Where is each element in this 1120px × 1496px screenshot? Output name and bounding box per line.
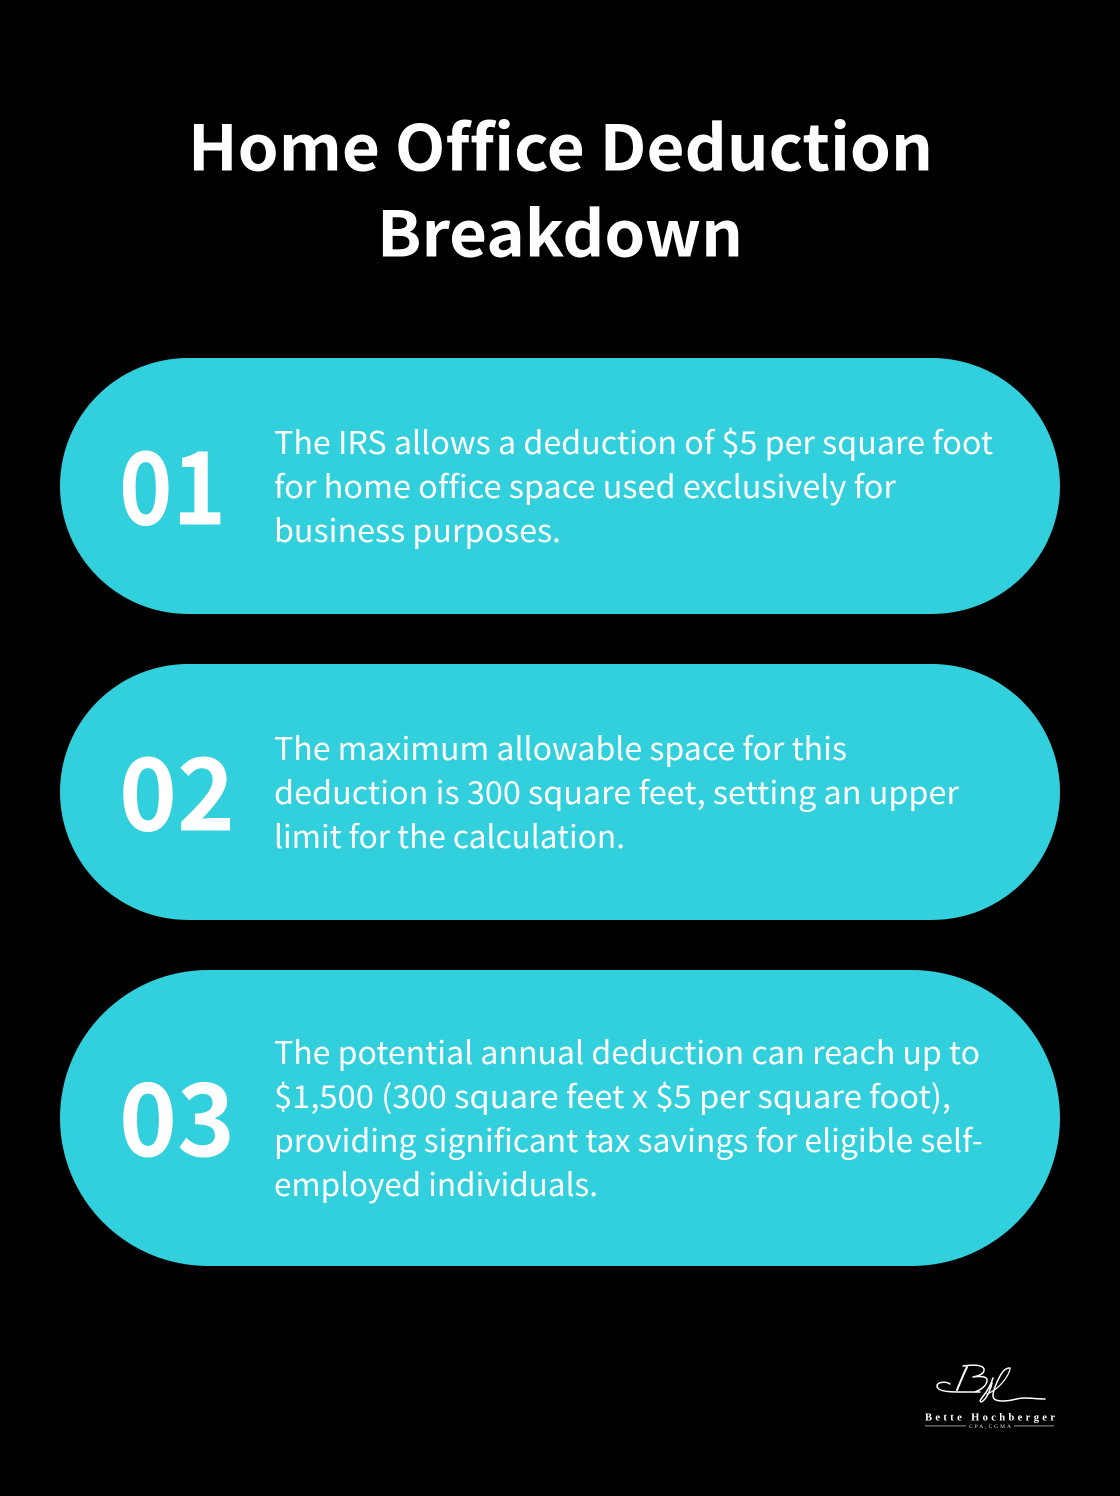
text block: step 01: The IRS allows a deduction of $5 per square foot [274,418,993,464]
title: Home Office Deduction [188,98,933,190]
logo name: Bette Hochberger [925,1412,1055,1424]
text block: step 02 [274,724,960,858]
text block: step 03 [274,1028,983,1206]
text block: step 01 [274,418,993,552]
title [188,98,933,276]
step number 02: 02 [119,714,235,860]
panel: step 03 [60,970,1060,1266]
panel: step 02 [60,664,1060,920]
text block: step 02: limit for the calculation. [274,812,625,858]
text block: step 02: The maximum allowable space for this [274,724,847,770]
text block: step 03: providing significant tax savings for eligible self- [274,1116,983,1162]
text block: step 03: employed individuals. [274,1160,598,1206]
icon: signature monogram [937,1365,1045,1402]
logo credentials: CPA,CGMA [969,1424,1011,1430]
logo: Bette Hochberger [925,1365,1055,1430]
step number 01: 01 [119,408,226,554]
text block: step 03: The potential annual deduction can reach up to [274,1028,980,1074]
text block: step 02: deduction is 300 square feet, setting an upper [274,768,960,814]
title: Breakdown [377,184,743,276]
text block: step 01: for home office space used exclusively for [274,462,897,508]
panel: step 01 [60,358,1060,614]
text block: step 01: business purposes. [274,506,561,552]
step number 03: 03 [119,1040,235,1186]
text block: step 03: $1,500 (300 square feet x $5 per square foot), [274,1072,951,1118]
